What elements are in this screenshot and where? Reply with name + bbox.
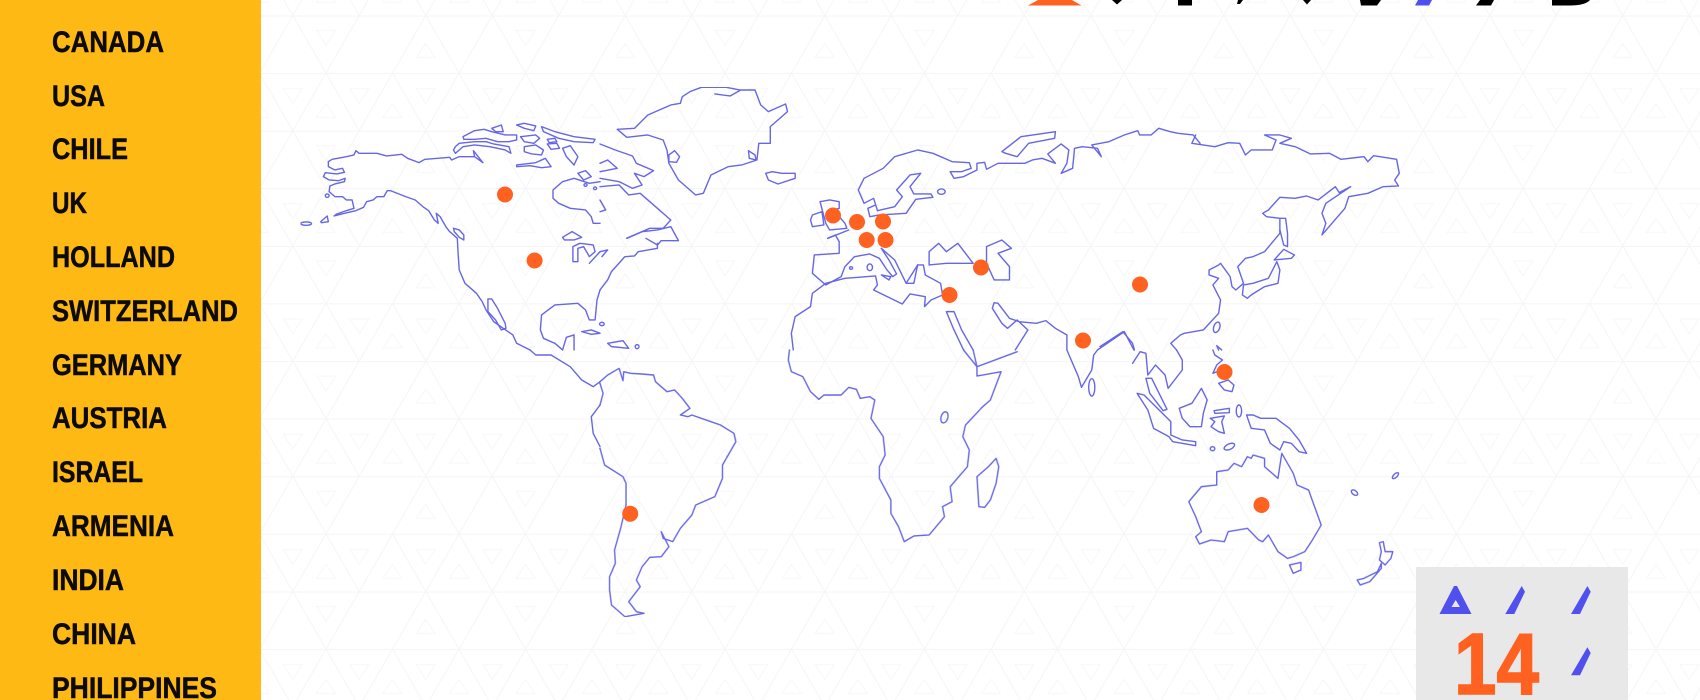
- country name: China: CHINA: [52, 618, 136, 651]
- icon: blue triangle: [1440, 586, 1472, 614]
- country name: Austria: AUSTRIA: [52, 402, 167, 435]
- country name: Germany: GERMANY: [52, 349, 182, 382]
- country name: Holland: HOLLAND: [52, 241, 175, 274]
- country name: Canada: CANADA: [52, 26, 164, 59]
- country name: Armenia: ARMENIA: [52, 510, 174, 543]
- world map outline: [301, 87, 1400, 617]
- icon: blue slash two: [1571, 586, 1591, 614]
- country name: Switzerland: SWITZERLAND: [52, 295, 238, 328]
- sidebar panel: country list: [0, 0, 261, 700]
- icon: blue slash one: [1505, 586, 1525, 614]
- country name: Chile: CHILE: [52, 133, 128, 166]
- icon: blue slash three: [1571, 647, 1591, 675]
- country name: UK: UK: [52, 187, 87, 220]
- cropped heading shapes at top edge: [1028, 0, 1590, 6]
- stat panel: 14 countries: [1416, 567, 1628, 700]
- country name: USA: USA: [52, 80, 105, 113]
- country name: India: INDIA: [52, 564, 124, 597]
- map location dots: [497, 186, 1270, 522]
- country name: Israel: ISRAEL: [52, 456, 143, 489]
